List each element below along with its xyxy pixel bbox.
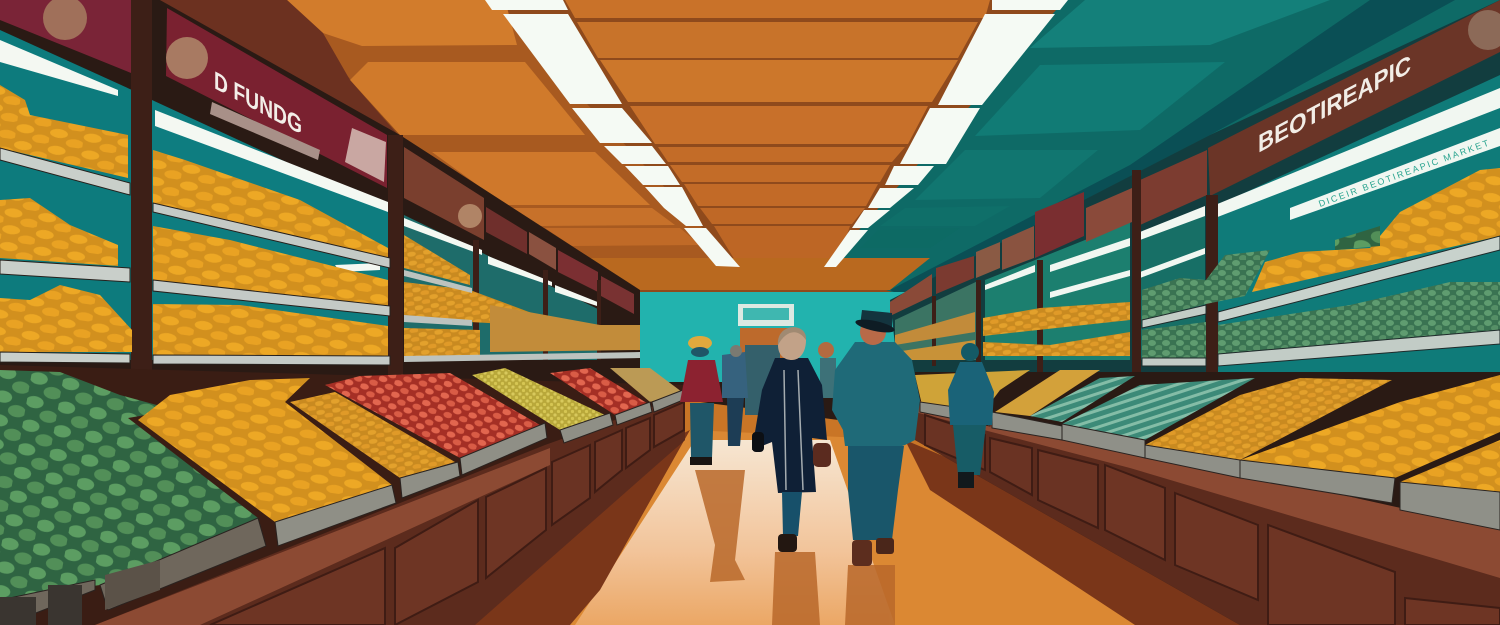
bin: orange large [1240, 375, 1500, 478]
counter: body [95, 395, 685, 625]
counter: wood panels [210, 548, 385, 625]
right wall: bay two back [1140, 215, 1205, 360]
bin: red far [550, 368, 650, 415]
shopper: blue jacket [722, 345, 748, 446]
right wall [890, 0, 1500, 390]
counter: wood panels [1268, 525, 1395, 625]
produce: right green bay [1142, 250, 1500, 358]
floor [470, 400, 1240, 625]
counter: ledge [915, 400, 1500, 578]
posts [932, 170, 1218, 388]
bin: far yellow [915, 370, 1030, 410]
counter: body [915, 405, 1500, 625]
sign: D FUNDG: D FUNDG [214, 66, 302, 140]
distant shoppers [688, 336, 836, 415]
bin fronts [0, 390, 683, 625]
back wall [635, 292, 905, 382]
counter: ledge [95, 448, 550, 625]
bin: red [325, 373, 540, 458]
right wall: base [890, 0, 1500, 390]
foreground edge tags: left [0, 560, 160, 625]
bin: far orange [995, 370, 1100, 416]
walker: teal coat with hat [832, 310, 920, 566]
left wall: base [0, 0, 640, 390]
sign row: receding left [404, 147, 634, 314]
bin: pale green [1030, 376, 1135, 422]
right counter [915, 372, 1500, 625]
sign: top-left [0, 0, 136, 75]
posts [131, 0, 601, 392]
ceiling: brown fascia left [160, 0, 640, 295]
right produce bins [915, 370, 1500, 530]
walker: dark coat [752, 327, 831, 552]
counter: backing [0, 365, 685, 625]
shelf strips: left bay two [153, 203, 390, 365]
shelf strips: left bay one [0, 148, 130, 363]
right wall: bay teal back [1218, 75, 1500, 385]
bin: green long [1062, 378, 1255, 440]
left wall: teal shelf back bay one [0, 30, 132, 360]
label strip: upper right: DICEIR BEOTIREAPIC MARKET [1317, 138, 1490, 209]
ceiling: left panels [287, 0, 517, 46]
right wall: bay four back [895, 280, 980, 360]
ceiling: right teal side [825, 0, 1500, 295]
lights: left wall [0, 40, 600, 307]
ceiling lights: right strip [824, 0, 1068, 267]
ceiling: dark teal fascia right [890, 0, 1455, 295]
bin: orange [1145, 378, 1392, 460]
left counter [0, 365, 685, 625]
produce: right upper bay [1252, 168, 1500, 292]
shopper: red jacket [680, 347, 723, 465]
produce: right far bays [895, 302, 1130, 360]
bin: orange [138, 378, 392, 522]
bin: green [0, 370, 258, 600]
bin: orange small [290, 392, 455, 478]
lights: right wall [985, 88, 1500, 298]
sign: BEOTIREAPIC: BEOTIREAPIC [1258, 49, 1411, 159]
sign: BEOTIREAPIC [1208, 0, 1500, 196]
left produce bins [0, 368, 683, 625]
shelf strips: left bay three [404, 270, 640, 362]
produce: left bay three [404, 235, 640, 356]
bin: yellow [472, 368, 605, 430]
shelf strip [1218, 236, 1500, 322]
bin: tan far [610, 368, 682, 402]
right wall: bay three back [985, 222, 1130, 360]
left wall: teal shelf back bay two [152, 100, 390, 360]
bin fronts [920, 402, 1500, 530]
produce: left bay two [153, 150, 388, 356]
ceiling: left orange side [280, 0, 740, 268]
ceiling: center panels [565, 0, 990, 262]
sign: D FUNDG [166, 8, 387, 188]
counter: backing [915, 372, 1500, 625]
left wall: bay three back [404, 215, 600, 360]
shadows of walkers [695, 470, 895, 625]
ceiling lights: left strip [485, 0, 740, 267]
ceiling [0, 0, 1500, 300]
produce: left bay one [0, 85, 132, 352]
bin: bottom right [1400, 440, 1500, 492]
sign row: receding right [890, 150, 1207, 316]
walker: far right teal coat [948, 343, 994, 488]
shelf strips [1142, 305, 1500, 366]
left wall [0, 0, 640, 392]
